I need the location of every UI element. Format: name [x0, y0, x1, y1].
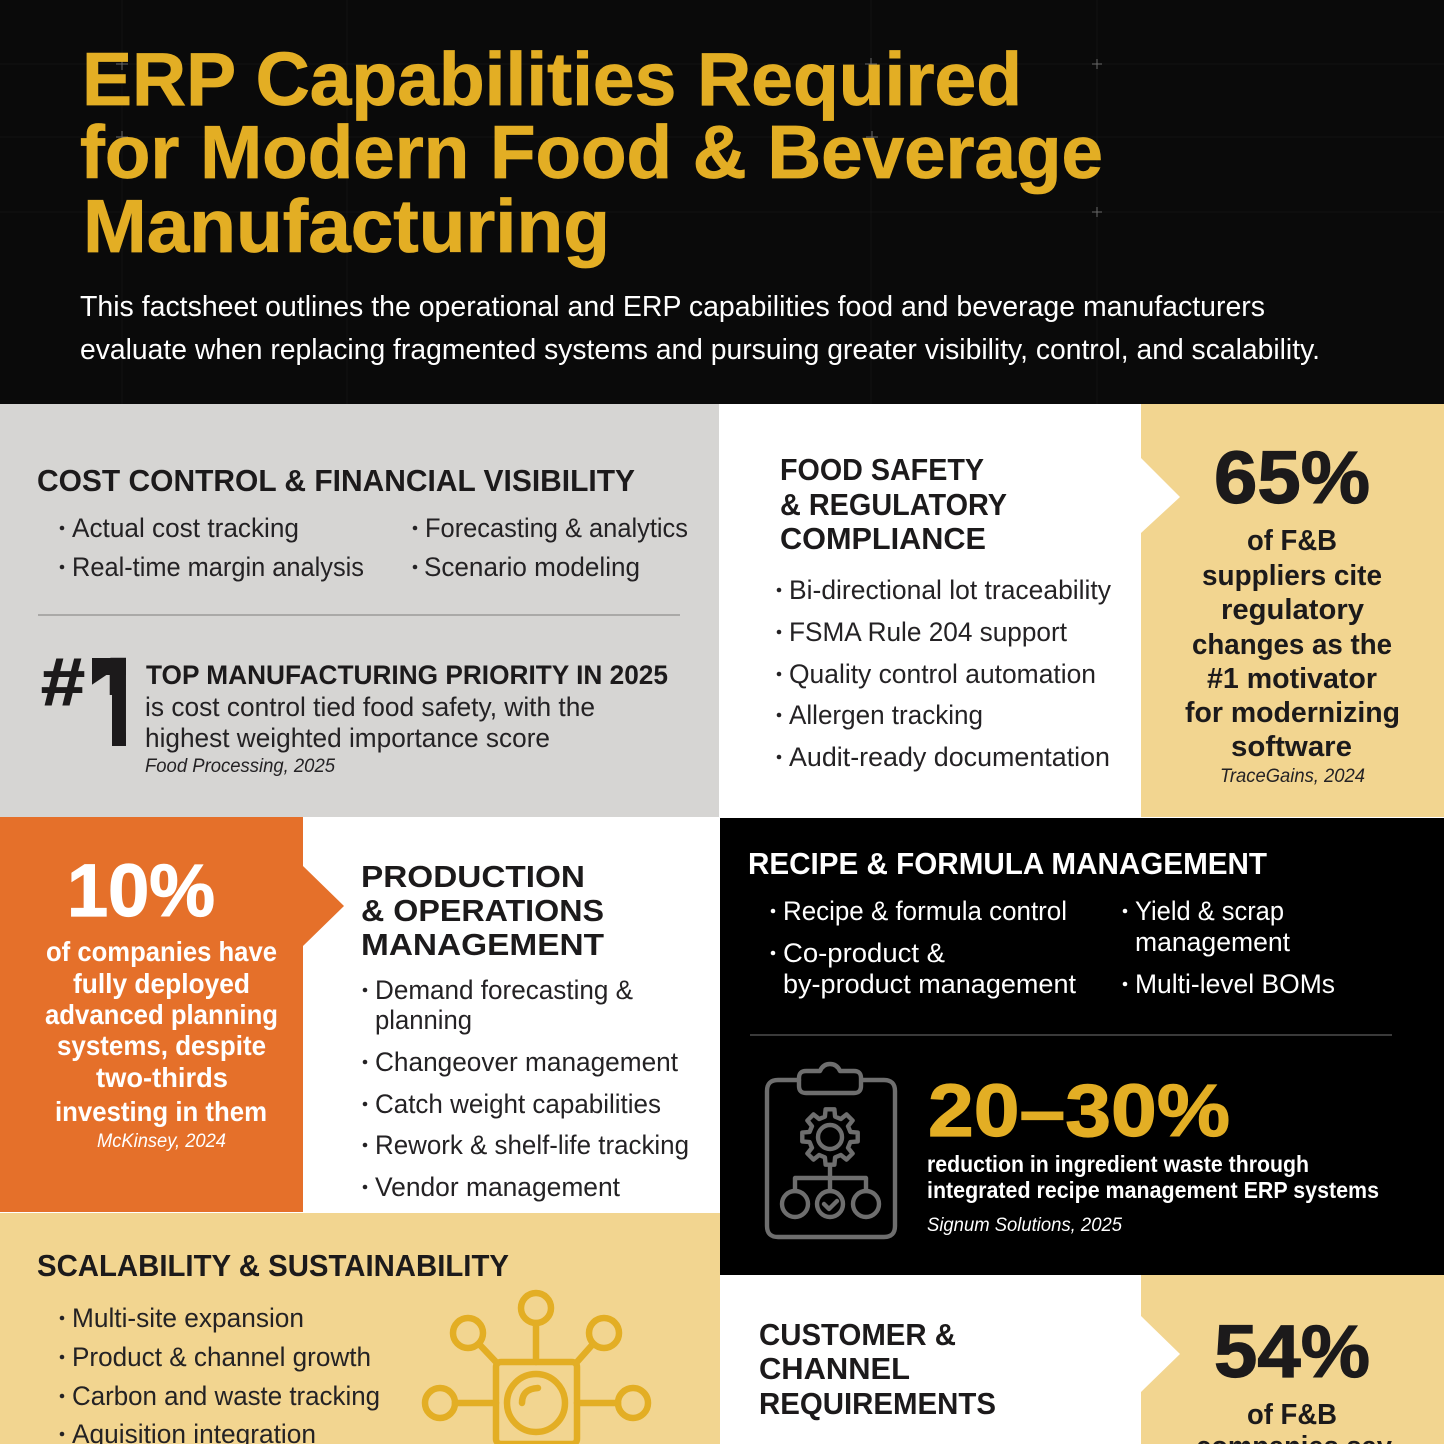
source: TraceGains: TraceGains, 2024 [1220, 766, 1365, 787]
panel: production and operations management [303, 817, 720, 1213]
panel: recipe and formula management [720, 818, 1444, 1275]
bullet list: food safety: Audit-ready documentation [789, 742, 1110, 772]
bullet list: scalability: Multi-site expansion [72, 1303, 304, 1333]
heading: food safety: & REGULATORY [780, 487, 1007, 522]
stat description [927, 1151, 1379, 1203]
bullet list: cost control [60, 513, 688, 582]
stat description: #1 motivator [1207, 663, 1377, 695]
stat number: 10%: 10% [67, 849, 215, 932]
stat number: 54%: 54% [1214, 1310, 1370, 1393]
stat number: 20–30%: 20–30% [928, 1069, 1230, 1152]
bullet list: recipe: by-product management [783, 969, 1076, 999]
arrow [1141, 1316, 1180, 1392]
bullet list: recipe [771, 896, 1335, 999]
stat description: two-thirds [96, 1062, 228, 1093]
stat text: top manufacturing priority: highest weighted importance score [145, 723, 550, 753]
stat description: of F&B [1247, 1399, 1337, 1431]
stat description: reduction in ingredient waste through [927, 1151, 1309, 1177]
heading: customer [759, 1317, 996, 1421]
stat description: suppliers cite [1202, 560, 1382, 592]
heading: food safety: COMPLIANCE [780, 521, 986, 556]
bullet list: cost control: Real-time margin analysis [72, 552, 364, 582]
heading: production: PRODUCTION [361, 859, 585, 894]
panel: food safety and regulatory compliance [719, 404, 1141, 817]
stat text: top manufacturing priority: Food Processing, 2025 [145, 756, 335, 777]
stat text: top manufacturing priority: is cost control tied food safety, with the [145, 692, 595, 722]
stat description: integrated recipe management ERP systems [927, 1177, 1379, 1203]
bullet list: food safety: FSMA Rule 204 support [789, 617, 1067, 647]
stat number: 65%: 65% [1214, 436, 1370, 519]
heading: production: & OPERATIONS [361, 893, 604, 928]
heading: customer: CUSTOMER & [759, 1317, 956, 1352]
bullet list: cost control: Scenario modeling [424, 552, 640, 582]
bullet list: production: Vendor management [375, 1172, 620, 1202]
heading: cost control: COST CONTROL & FINANCIAL VISIBILITY [37, 463, 635, 498]
stat description: for modernizing [1185, 697, 1400, 729]
bullet list: food safety [777, 575, 1111, 772]
bullet list: recipe: management [1135, 927, 1290, 957]
source: Signum Solutions: Signum Solutions, 2025 [927, 1215, 1122, 1236]
source: McKinsey: McKinsey, 2024 [97, 1131, 226, 1152]
stat: #1: # [41, 644, 85, 720]
heading: customer: REQUIREMENTS [759, 1386, 996, 1421]
bullet list: production: planning [375, 1005, 472, 1035]
stat description: of F&B [1247, 525, 1337, 557]
bullet list: food safety: Allergen tracking [789, 700, 983, 730]
title [80, 37, 1103, 268]
panel: scalability and sustainability [0, 1213, 720, 1444]
bullet list: production: Changeover management [375, 1047, 678, 1077]
bullet list: recipe: Yield & scrap [1135, 896, 1284, 926]
heading: food safety [780, 452, 1007, 556]
intro text: evaluate when replacing fragmented systems and pursuing greater visibility, control, and scalability. [80, 334, 1320, 366]
panel: header [0, 0, 1444, 404]
bullet list: scalability [60, 1303, 380, 1444]
stat description: regulatory [1221, 594, 1364, 626]
title: ERP Capabilities Required [82, 37, 1022, 121]
bullet list: scalability: Product & channel growth [72, 1342, 371, 1372]
bullet list: production: Demand forecasting & [375, 975, 633, 1005]
heading: production [361, 859, 604, 962]
bullet list: cost control: Forecasting & analytics [425, 513, 688, 543]
intro text: This factsheet outlines the operational and ERP capabilities food and beverage manufacturers [80, 291, 1265, 323]
arrow [1141, 458, 1180, 533]
bullet list: scalability: Carbon and waste tracking [72, 1381, 380, 1411]
stat description: changes as the [1192, 629, 1392, 661]
stat description [1196, 1399, 1392, 1444]
heading: food safety: FOOD SAFETY [780, 452, 984, 487]
bullet list: cost control: Actual cost tracking [72, 513, 299, 543]
bullet list: recipe: Co-product & [783, 938, 945, 968]
stat text: top manufacturing priority [145, 660, 668, 777]
bullet list: food safety: Quality control automation [789, 659, 1096, 689]
icon: network hub [425, 1293, 648, 1444]
panel: customer and channel requirements [720, 1275, 1141, 1444]
panel: cost control and financial visibility [0, 404, 719, 817]
stat description: of companies have [46, 936, 277, 967]
heading: production: MANAGEMENT [361, 927, 604, 962]
bullet list: recipe: Recipe & formula control [783, 896, 1067, 926]
stat description [1185, 525, 1400, 763]
heading: recipe: RECIPE & FORMULA MANAGEMENT [748, 846, 1267, 881]
bullet list: production [363, 975, 689, 1202]
stat: #1 [42, 658, 126, 746]
bullet list: food safety: Bi-directional lot traceability [789, 575, 1111, 605]
title: Manufacturing [83, 184, 610, 268]
stat description: advanced planning [45, 999, 278, 1030]
stat description: investing in them [55, 1096, 267, 1127]
icon: clipboard with gear and flow [767, 1064, 895, 1237]
heading: customer: CHANNEL [759, 1351, 910, 1386]
heading: scalability: SCALABILITY & SUSTAINABILITY [37, 1248, 509, 1283]
stat description [45, 936, 278, 1127]
bullet list: recipe: Multi-level BOMs [1135, 969, 1335, 999]
bullet list: production: Catch weight capabilities [375, 1089, 661, 1119]
panel: 54% stat [1141, 1275, 1444, 1444]
stat description: fully deployed [73, 968, 250, 999]
stat text: top manufacturing priority: TOP MANUFACTURING PRIORITY IN 2025 [146, 660, 668, 690]
stat: #1: 1 [82, 631, 148, 774]
arrow [303, 866, 344, 946]
bullet list: production: Rework & shelf-life tracking [375, 1130, 689, 1160]
panel: 10% stat [0, 817, 344, 1212]
title: for Modern Food & Beverage [80, 110, 1103, 194]
stat description: systems, despite [57, 1030, 266, 1061]
intro text [80, 291, 1320, 366]
panel: 65% stat [1141, 404, 1444, 817]
stat description: software [1231, 731, 1352, 763]
